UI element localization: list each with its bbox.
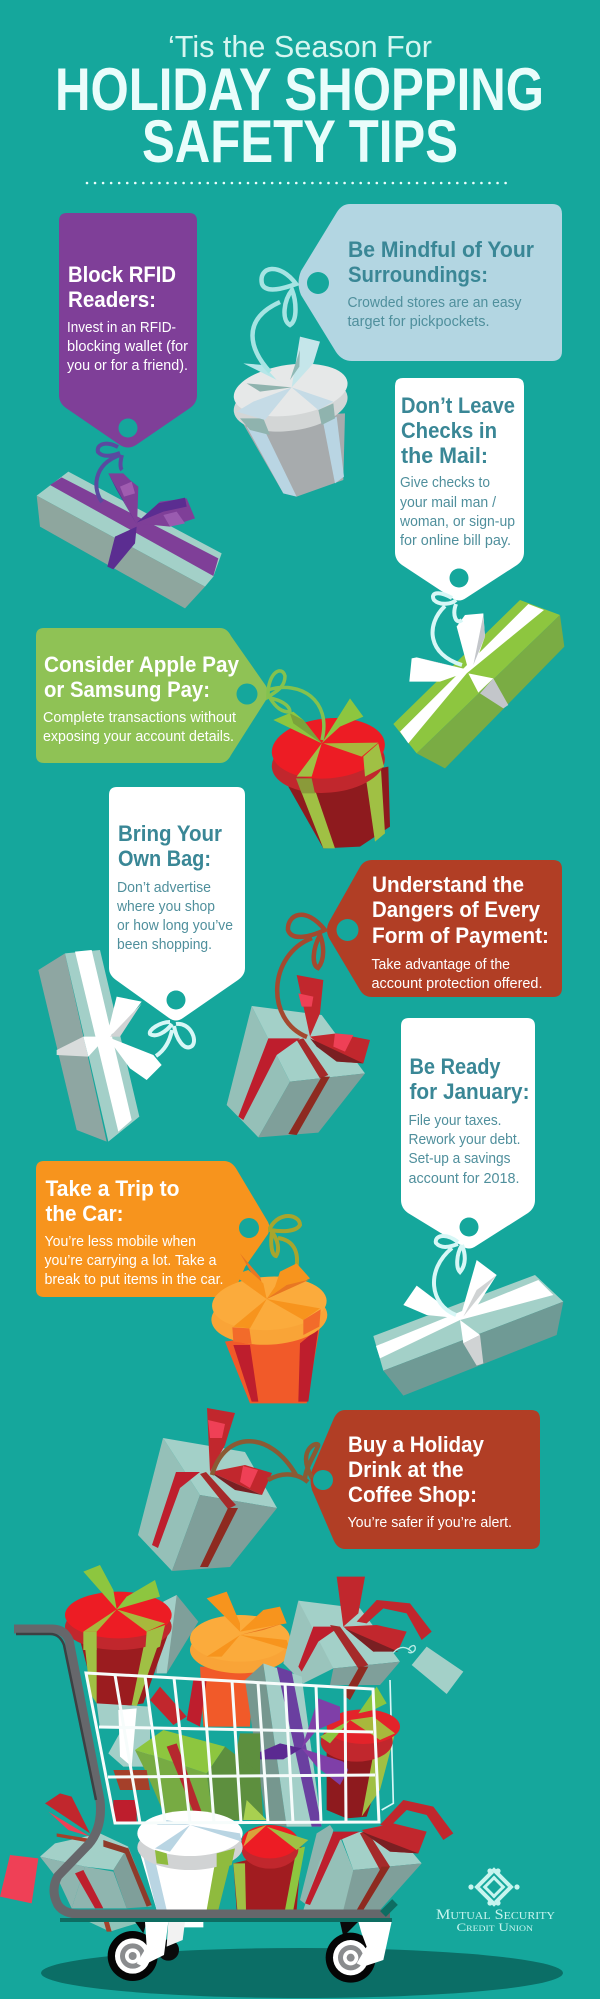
title — [55, 29, 544, 175]
shopping cart with gifts — [0, 1565, 463, 1983]
gift: white round tin — [230, 337, 351, 497]
tag: be ready for january: for January: — [410, 1079, 530, 1104]
tag: be ready for january: Be Ready — [410, 1054, 501, 1079]
tag: take a trip to the car: the Car: — [46, 1201, 124, 1226]
tag: bring your own bag: or how long you’ve — [117, 917, 233, 934]
logo: mutual security credit union: Mutual Security — [436, 1907, 555, 1923]
tag: bring your own bag: Don’t advertise — [117, 879, 211, 896]
gift: red round tin with green ribbon — [269, 698, 390, 848]
tag: buy a holiday drink at the coffee shop: Drink at the — [348, 1457, 464, 1482]
tag: consider apple pay or samsung pay — [36, 628, 324, 763]
ground shadow — [41, 1948, 563, 1998]
gift: green box with white ribbon — [393, 600, 564, 768]
bottom right box — [300, 1800, 453, 1910]
logo: mutual security credit union — [436, 1867, 555, 1934]
tag: understand the dangers of every form of payment: Take advantage of the — [372, 956, 510, 973]
tag: take a trip to the car: you’re carrying a lot. Take a — [44, 1252, 217, 1269]
tag: block RFID readers: Block RFID — [68, 262, 176, 287]
bottom white tin — [137, 1811, 243, 1927]
tag: understand the dangers of every form of payment: Form of Payment: — [372, 923, 549, 948]
cart gifts: upper left, red tin and orange tin — [65, 1565, 290, 1727]
cart basket wires — [86, 1673, 379, 1823]
tag: understand the dangers of every form of payment: Understand the — [372, 872, 524, 897]
tag: don't leave checks in the mail: your mail man / — [400, 494, 497, 511]
tag: bring your own bag: where you shop — [116, 898, 215, 915]
cart gifts: middle white box and green box — [97, 1680, 267, 1823]
tag: be ready for january: File your taxes. — [408, 1112, 502, 1129]
tag: don't leave checks in the mail — [395, 378, 524, 665]
tag: take a trip to the car: You’re less mobile when — [44, 1233, 196, 1250]
tag: be mindful of your surroundings: Surroundings: — [348, 262, 488, 287]
tag: be ready for january: Set-up a savings — [408, 1150, 510, 1167]
tag: be mindful of your surroundings: Be Mindful of Your — [348, 237, 534, 262]
cart gift: grey box with purple ribbon and right red tin — [245, 1663, 400, 1827]
tag: take a trip to the car — [36, 1161, 300, 1297]
tag: don't leave checks in the mail: Give checks to — [400, 474, 490, 491]
tag: consider apple pay or samsung pay: or Samsung Pay: — [44, 677, 210, 702]
gift: white tall box with white ribbon — [38, 950, 162, 1142]
tag: be ready for january: Rework your debt. — [408, 1131, 520, 1148]
tag: buy a holiday drink at the coffee shop — [212, 1410, 540, 1549]
tag: be mindful of your surroundings: target for pickpockets. — [348, 313, 490, 330]
tag: consider apple pay or samsung pay: exposing your account details. — [43, 728, 234, 745]
title: ‘Tis the Season For — [168, 29, 432, 64]
tag: bring your own bag: Own Bag: — [118, 846, 211, 871]
tag: buy a holiday drink at the coffee shop: Buy a Holiday — [348, 1432, 485, 1457]
tag: block RFID readers: blocking wallet (for — [67, 338, 188, 355]
gift: grey flat box with white ribbon — [373, 1260, 563, 1396]
tag: be ready for january: account for 2018. — [408, 1170, 520, 1187]
tag: understand the dangers of every form of payment — [277, 860, 562, 1037]
cart gifts: bottom row — [0, 1793, 453, 1932]
tag: bring your own bag — [109, 787, 245, 1056]
gift: purple ribbon box — [37, 472, 222, 608]
tag: block RFID readers: Readers: — [68, 287, 156, 312]
cart back rail — [382, 1680, 393, 1810]
tag: buy a holiday drink at the coffee shop: Coffee Shop: — [348, 1482, 477, 1507]
tag: consider apple pay or samsung pay: Consider Apple Pay — [44, 652, 240, 677]
gift: grey box with red ribbon — [227, 975, 370, 1137]
tag: bring your own bag: Bring Your — [118, 821, 222, 846]
cart gift: top right grey box with red bow and tag — [283, 1577, 463, 1700]
gift: grey box under coffee shop tag — [138, 1408, 277, 1571]
gift: orange round tin — [210, 1253, 329, 1403]
tag: don't leave checks in the mail: Checks in — [401, 418, 497, 443]
tag: consider apple pay or samsung pay: Complete transactions without — [43, 709, 237, 726]
tag: be ready for january — [401, 1018, 535, 1315]
tag: don't leave checks in the mail: the Mail: — [401, 443, 488, 468]
tag: block RFID readers: you or for a friend). — [67, 357, 188, 374]
tag: bring your own bag: been shopping. — [117, 936, 212, 953]
tag: be mindful of your surroundings — [252, 204, 562, 372]
tag: don't leave checks in the mail: for online bill pay. — [400, 532, 511, 549]
logo: mutual security credit union: Credit Union — [456, 1920, 533, 1934]
title: SAFETY TIPS — [142, 108, 458, 175]
tag: block RFID readers — [59, 213, 197, 502]
tag: take a trip to the car: Take a Trip to — [46, 1176, 180, 1201]
tag: buy a holiday drink at the coffee shop: You’re safer if you’re alert. — [348, 1514, 512, 1531]
tag: understand the dangers of every form of payment: Dangers of Every — [372, 897, 541, 922]
red hanging tag — [0, 1855, 38, 1903]
tag: take a trip to the car: break to put items in the car. — [44, 1271, 224, 1288]
tag: don't leave checks in the mail: Don’t Leave — [401, 393, 515, 418]
tag: don't leave checks in the mail: woman, or sign-up — [399, 513, 515, 530]
tag: block RFID readers: Invest in an RFID- — [67, 319, 176, 336]
tag: understand the dangers of every form of payment: account protection offered. — [372, 975, 542, 992]
tag: be mindful of your surroundings: Crowded stores are an easy — [348, 294, 522, 311]
bottom red tin — [233, 1825, 308, 1910]
cart frame — [14, 1629, 395, 1920]
bottom left box — [40, 1793, 152, 1932]
cart wheels — [108, 1922, 392, 1983]
